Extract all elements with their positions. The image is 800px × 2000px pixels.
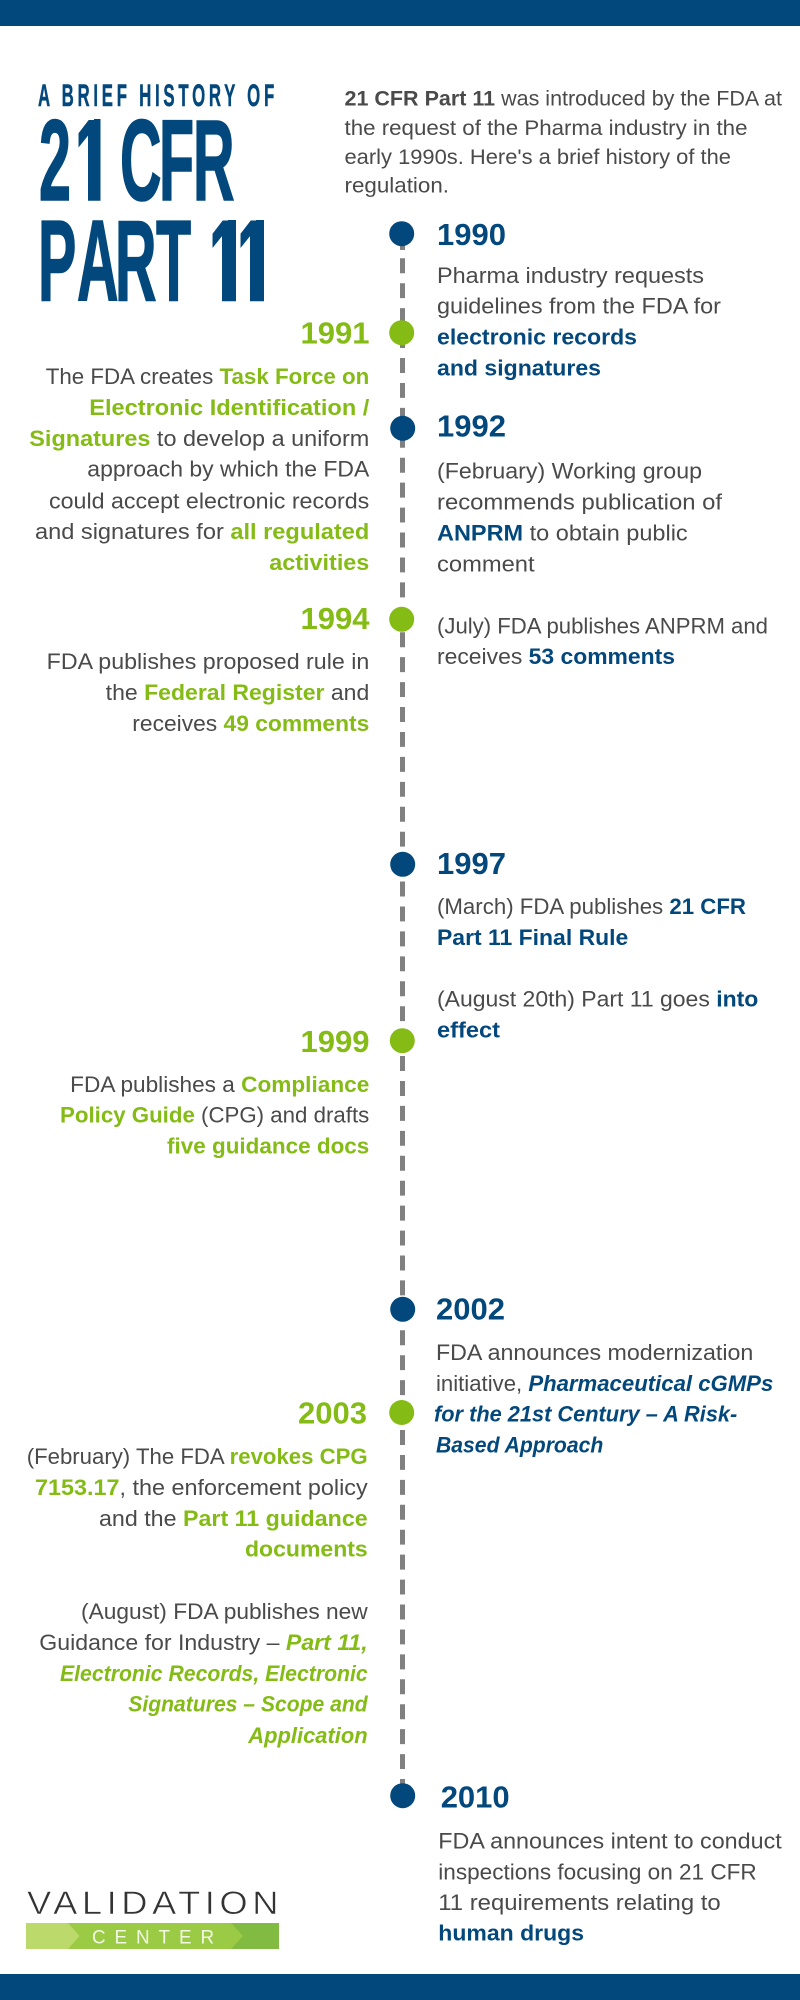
logo: Validation Center [26, 1885, 283, 1949]
entry: 2002 [390, 1292, 773, 1458]
text 1992 February: recommends publication of [437, 490, 723, 514]
title kicker: A BRIEF HISTORY OF [38, 77, 278, 113]
text 1994 [47, 649, 369, 736]
entry: 1990 [389, 217, 722, 380]
text 2002: for the 21st Century – A Risk- [434, 1402, 737, 1427]
text 1997 August [437, 987, 758, 1043]
text 1992 July [437, 614, 768, 669]
marker 1991 [389, 320, 414, 345]
text 2010: 11 requirements relating to [438, 1890, 721, 1915]
text 1991 [29, 364, 370, 575]
text 2003 August: (August) FDA publishes new [81, 1599, 368, 1624]
year 2010: 2010 [441, 1780, 510, 1815]
text 1991: Signatures to develop a uniform [29, 426, 369, 451]
text 2003 February: documents [245, 1537, 368, 1562]
year 1990: 1990 [437, 217, 506, 252]
text 2003 February: and the Part 11 guidance [99, 1506, 368, 1531]
year 1997: 1997 [437, 846, 506, 881]
entry: 1997 [390, 846, 758, 1043]
text 1994: receives 49 comments [132, 711, 369, 736]
year 2002: 2002 [436, 1292, 505, 1326]
marker 1999 [390, 1028, 415, 1053]
text 1991: Electronic Identification / [89, 395, 370, 420]
text 1999: Policy Guide (CPG) and drafts [60, 1102, 369, 1128]
logo wordmark: VALIDATION [27, 1885, 283, 1921]
marker 1990 [389, 221, 414, 246]
text 2003 February: (February) The FDA revokes CPG [27, 1444, 368, 1469]
text 1991: approach by which the FDA [87, 457, 369, 482]
text 2003 February [27, 1444, 368, 1562]
intro text: the request of the Pharma industry in the [344, 116, 748, 140]
text 1991: could accept electronic records [49, 488, 369, 513]
marker 2010 [390, 1783, 415, 1808]
intro text: 21 CFR Part 11 was introduced by the FDA at [344, 87, 782, 111]
text 2002 [434, 1340, 773, 1458]
text 2002: FDA announces modernization [436, 1340, 753, 1365]
text 1992 February: (February) Working group [437, 458, 702, 484]
text 2002: Based Approach [436, 1433, 603, 1458]
entry: 1999 [60, 1024, 415, 1158]
marker 2003 [389, 1400, 414, 1425]
entry: 1991 [29, 316, 414, 575]
text 2002: initiative, Pharmaceutical cGMPs [436, 1371, 773, 1396]
text 1992 February [437, 458, 723, 576]
text 1997 March: (March) FDA publishes 21 CFR [437, 894, 746, 919]
year 1991: 1991 [301, 316, 370, 350]
text 2003 August: Application [247, 1723, 368, 1748]
text 1997 March [437, 894, 746, 950]
text 1991: activities [269, 550, 369, 575]
text 1997 August: (August 20th) Part 11 goes into [437, 987, 758, 1012]
entry: 1992 [390, 409, 768, 669]
entry: 2003 [27, 1396, 414, 1748]
text 1992 February: ANPRM to obtain public [437, 520, 688, 546]
text 2010: human drugs [438, 1921, 584, 1946]
text 1994: the Federal Register and [106, 680, 369, 705]
text 1999: five guidance docs [167, 1134, 369, 1158]
text 2003 February: 7153.17, the enforcement policy [35, 1475, 368, 1500]
text 1991: The FDA creates Task Force on [46, 364, 369, 389]
text 1991: and signatures for all regulated [35, 519, 369, 544]
text 1990: electronic records [437, 324, 637, 350]
year 1992: 1992 [437, 409, 506, 444]
text 2003 August: Electronic Records, Electronic [60, 1661, 368, 1686]
text 1992 February: comment [437, 552, 535, 576]
year 1999: 1999 [301, 1024, 370, 1059]
text 2003 August: Guidance for Industry – Part 11, [39, 1630, 368, 1655]
text 1997 August: effect [437, 1018, 501, 1043]
logo banner [26, 1923, 279, 1949]
entry: 1994 [47, 601, 414, 736]
marker 1994 [389, 607, 414, 632]
text 1999: FDA publishes a Compliance [70, 1072, 369, 1097]
text 2003 August [39, 1599, 369, 1748]
text 2010: inspections focusing on 21 CFR [438, 1859, 757, 1884]
marker 1992 [390, 416, 415, 441]
title line 2: PART 11 [38, 198, 269, 326]
marker 2002 [390, 1297, 415, 1322]
title [38, 77, 278, 326]
bottom bar [0, 1974, 800, 2000]
top bar [0, 0, 800, 26]
text 1990: guidelines from the FDA for [437, 294, 722, 318]
intro text: regulation. [344, 174, 449, 198]
text 1997 March: Part 11 Final Rule [437, 925, 628, 950]
intro text [344, 87, 782, 198]
text 1994: FDA publishes proposed rule in [47, 649, 369, 674]
text 1999 [60, 1072, 369, 1158]
text 1990: and signatures [437, 356, 601, 380]
text 1992 July: (July) FDA publishes ANPRM and [437, 614, 768, 638]
text 2010: FDA announces intent to conduct [438, 1828, 782, 1853]
marker 1997 [390, 852, 415, 877]
text 1990: Pharma industry requests [437, 263, 704, 288]
entry: 2010 [390, 1780, 782, 1946]
year 1994: 1994 [301, 601, 370, 636]
text 1990 [437, 263, 722, 380]
intro text: early 1990s. Here's a brief history of the [344, 145, 731, 169]
text 2010 [438, 1828, 782, 1946]
timeline dashed line [400, 258, 405, 1790]
title line 1: 21 CFR [39, 98, 235, 225]
text 1992 July: receives 53 comments [437, 644, 675, 669]
text 2003 August: Signatures – Scope and [128, 1692, 369, 1717]
logo banner: CENTER [92, 1928, 223, 1948]
year 2003: 2003 [298, 1396, 367, 1430]
